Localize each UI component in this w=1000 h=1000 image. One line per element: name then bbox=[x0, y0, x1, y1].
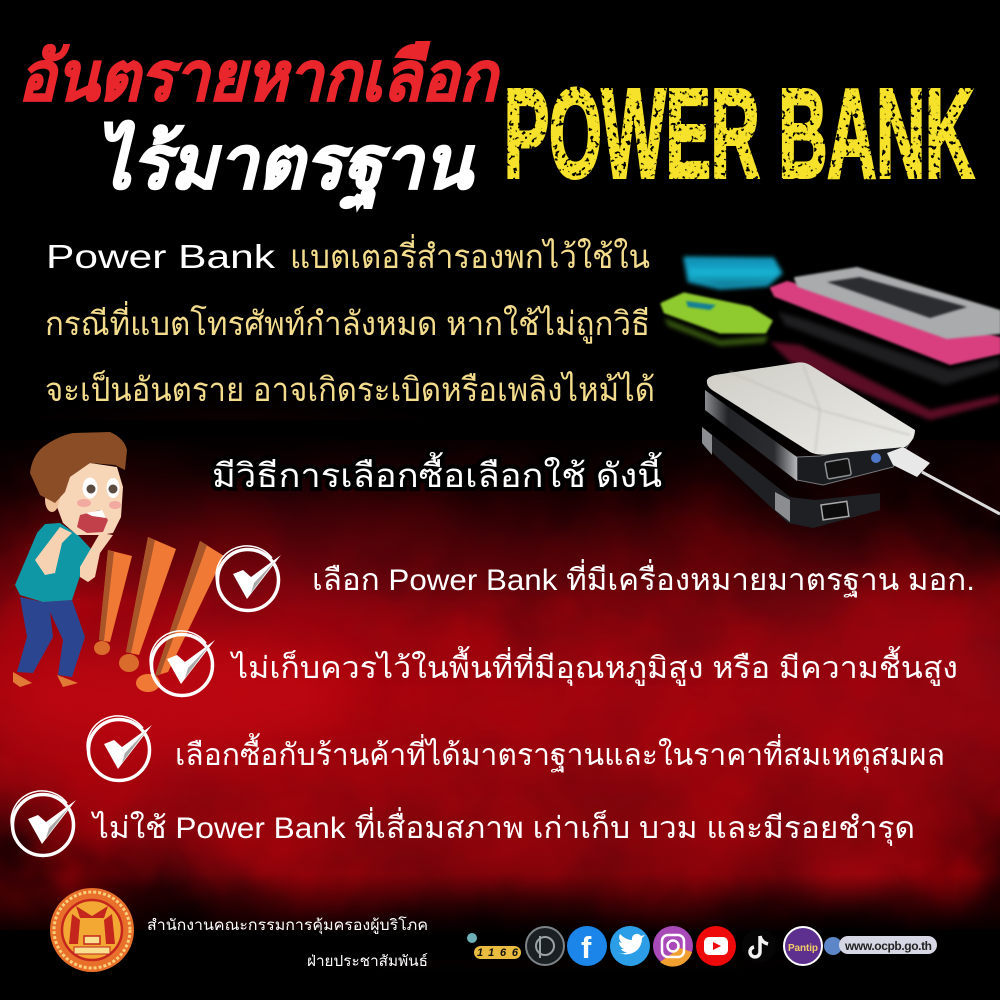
reflection bbox=[702, 427, 880, 528]
icon: tiktok bbox=[742, 929, 776, 963]
boy shoes bbox=[13, 672, 78, 687]
boy head bbox=[57, 463, 123, 535]
checklist bbox=[11, 546, 975, 856]
icon: facebook bbox=[567, 926, 607, 966]
check item 2 bbox=[150, 631, 958, 696]
check item 4: ไม่ใช้ Power Bank ที่เสื่อมสภาพ เก่าเก็บ บวม และมีรอยชำรุด bbox=[91, 807, 915, 847]
photo: power banks on black surface bbox=[662, 258, 1000, 528]
boy cheeks bbox=[77, 499, 121, 509]
green power bank bbox=[662, 294, 771, 332]
check item 3: เลือกซื้อกับร้านค้าที่ได้มาตราฐานและในราคาที่สมเหตุสมผล bbox=[175, 733, 945, 774]
intro line 2: กรณีที่แบตโทรศัพท์กำลังหมด หากใช้ไม่ถูกวิธี bbox=[45, 301, 650, 344]
boy legs bbox=[17, 597, 85, 677]
icon: website: www.ocpb.go.th bbox=[844, 939, 932, 953]
boy mouth bbox=[77, 510, 108, 533]
icon: instagram bbox=[653, 926, 693, 967]
intro line 3: จะเป็นอันตราย อาจเกิดระเบิดหรือเพลิงไหม้ได้ bbox=[45, 370, 655, 408]
title: no standard: ไร้มาตรฐาน bbox=[95, 120, 475, 211]
title: danger: อันตรายหากเลือก bbox=[18, 39, 501, 115]
icon: ocpb bbox=[526, 927, 564, 965]
check item 2: ไม่เก็บควรไว้ในพื้นที่ที่มีอุณหภูมิสูง หรือ มีความชื้นสูง bbox=[230, 646, 958, 687]
check item 1: เลือก Power Bank ที่มีเครื่องหมายมาตรฐาน มอก. bbox=[312, 559, 975, 598]
cyan power bank bbox=[685, 258, 781, 288]
intro line 1: แบตเตอรี่สำรองพกไว้ใช้ใน bbox=[290, 234, 650, 275]
check item 1 bbox=[216, 546, 975, 610]
boy shirt bbox=[15, 523, 92, 602]
subheading: มีวิธีการเลือกซื้อเลือกใช้ ดังนี้ bbox=[212, 452, 663, 494]
icon: website bbox=[824, 936, 937, 955]
white power bank bbox=[797, 438, 913, 485]
organisation line 2: ฝ่ายประชาสัมพันธ์ bbox=[307, 953, 428, 970]
boy eyes bbox=[82, 478, 120, 498]
intro line 1 bbox=[46, 234, 650, 275]
footer: organisation name bbox=[147, 916, 428, 970]
footer: contact icons bbox=[467, 926, 937, 967]
check item 4 bbox=[11, 791, 915, 856]
illustration: scared boy with exclamation marks bbox=[13, 432, 224, 692]
grey power bank bbox=[795, 268, 1000, 338]
usb cable bbox=[887, 447, 930, 477]
pink power bank bbox=[771, 282, 1000, 364]
icon: 1166 hotline bbox=[467, 933, 521, 959]
icon: facebook: f bbox=[581, 930, 592, 965]
logo: office seal bbox=[50, 888, 134, 972]
check item 3 bbox=[87, 716, 945, 780]
intro paragraph bbox=[45, 234, 655, 408]
icon: twitter bbox=[610, 926, 650, 966]
boy hair bbox=[30, 432, 127, 503]
exclamation marks bbox=[94, 537, 224, 692]
icon: pantip: Pantip bbox=[788, 943, 818, 954]
icon: pantip bbox=[784, 927, 822, 965]
boy ear bbox=[45, 488, 59, 512]
boy arms bbox=[35, 527, 113, 582]
icon: 1166 hotline: 1166 bbox=[477, 947, 519, 959]
organisation line 1: สำนักงานคณะกรรมการคุ้มครองผู้บริโภค bbox=[147, 916, 428, 935]
intro line 1: Power Bank bbox=[46, 238, 276, 275]
icon: youtube bbox=[696, 926, 736, 966]
